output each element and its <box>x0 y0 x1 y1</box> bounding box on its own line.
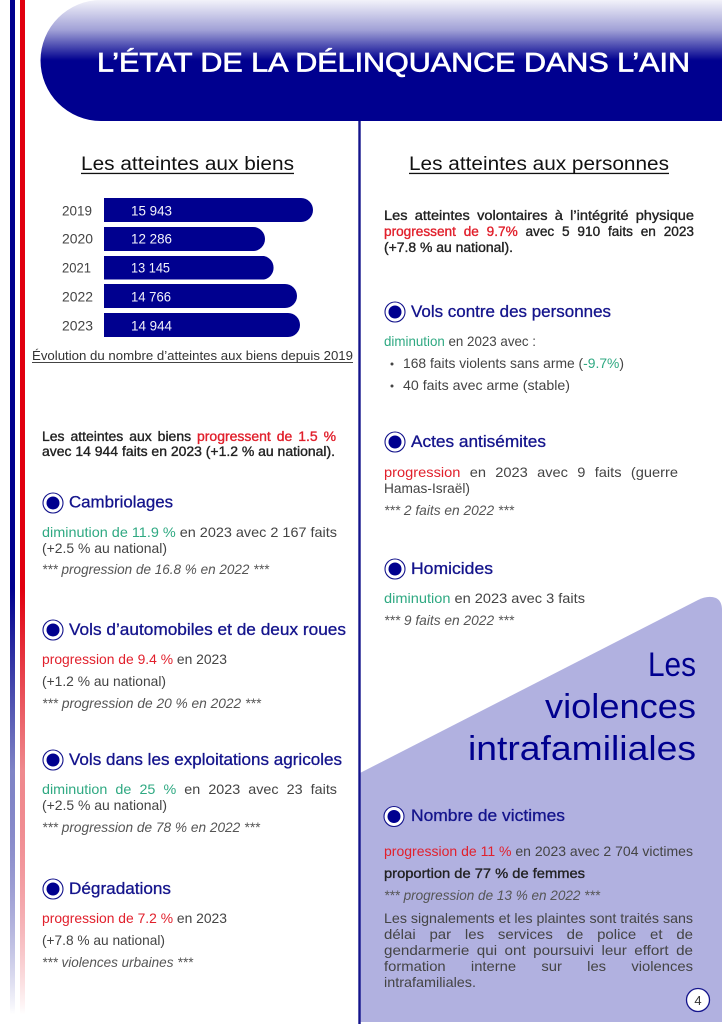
bar 2021: 13 145 <box>131 260 170 276</box>
text block: signalements: délai par les services de police et de <box>384 926 693 942</box>
bar 2020: 2020 <box>62 230 93 246</box>
section: cambriolages <box>42 493 337 577</box>
text block: signalements: Les signalements et les plaintes sont traités sans <box>384 910 693 926</box>
section: vols d'automobiles: *** progression de 20 % en 2022 *** <box>42 695 262 711</box>
text block: atteintes aux personnes summary: (+7.8 % au national). <box>384 240 513 255</box>
section: actes antisémites: Actes antisémites <box>411 433 546 451</box>
bar 2020 <box>62 227 265 251</box>
bar 2022: 2022 <box>62 288 93 304</box>
title banner: L’ÉTAT DE LA DÉLINQUANCE DANS L’AIN <box>97 48 690 78</box>
section: dégradations: (+7.8 % au national) <box>42 932 165 948</box>
bar chart: atteintes aux biens <box>62 198 313 337</box>
section: homicides: *** 9 faits en 2022 *** <box>384 612 515 628</box>
section: dégradations: progression de 7.2 % en 2023 <box>42 910 227 926</box>
icon: bullet <box>43 879 63 899</box>
heading: les violences intrafamiliales: intrafamiliales <box>468 730 696 768</box>
section: vols dans les exploitations agricoles: (+2.5 % au national) <box>42 797 167 813</box>
section: homicides <box>384 559 585 628</box>
text block: signalements <box>384 910 693 990</box>
section: cambriolages: diminution de 11.9 % en 2023 avec 2 167 faits <box>42 524 337 540</box>
section: vols d'automobiles: Vols d’automobiles et de deux roues <box>69 621 346 639</box>
section: cambriolages: Cambriolages <box>69 494 173 512</box>
section: cambriolages: *** progression de 16.8 % en 2022 *** <box>42 561 270 577</box>
section: vols d'automobiles <box>42 620 346 711</box>
page number: 4 <box>694 993 702 1008</box>
section: vols dans les exploitations agricoles: diminution de 25 % en 2023 avec 23 faits <box>42 781 337 797</box>
section: vols d'automobiles: progression de 9.4 % en 2023 <box>42 651 227 667</box>
icon: bullet <box>385 302 405 322</box>
section: vols d'automobiles: (+1.2 % au national) <box>42 673 166 689</box>
section: nombre de victimes: proportion de 77 % de femmes <box>384 865 585 881</box>
bar 2021 <box>62 256 274 280</box>
section: dégradations: *** violences urbaines *** <box>42 954 194 970</box>
heading: les atteintes aux biens: Les atteintes aux biens <box>81 154 294 175</box>
section: vols contre des personnes: diminution en 2023 avec : <box>384 333 536 349</box>
section: nombre de victimes <box>384 806 693 990</box>
heading: les violences intrafamiliales <box>468 646 696 768</box>
icon: bullet <box>385 432 405 452</box>
section: dégradations <box>42 879 227 970</box>
icon: bullet <box>385 559 405 579</box>
bar 2022: 14 766 <box>131 288 171 304</box>
heading: les violences intrafamiliales: violences <box>545 688 696 726</box>
bar 2023: 14 944 <box>131 318 172 334</box>
icon: bullet <box>43 750 63 770</box>
column divider <box>358 121 361 1024</box>
section: vols dans les exploitations agricoles: Vols dans les exploitations agricoles <box>69 751 342 769</box>
icon: bullet <box>43 493 63 513</box>
section: nombre de victimes: Nombre de victimes <box>411 807 565 825</box>
section: vols contre des personnes <box>384 302 624 393</box>
heading: les violences intrafamiliales: Les <box>648 646 696 684</box>
section: nombre de victimes: progression de 11 % en 2023 avec 2 704 victimes <box>384 843 693 859</box>
section: vols contre des personnes: 40 faits avec arme (stable) <box>403 377 570 393</box>
section: vols dans les exploitations agricoles <box>42 750 342 835</box>
section: vols contre des personnes: 168 faits violents sans arme (-9.7%) <box>403 355 624 371</box>
title banner <box>41 0 722 121</box>
tricolour stripes <box>10 0 25 1015</box>
text block: atteintes aux personnes summary: Les atteintes volontaires à l’intégrité physique <box>384 208 694 223</box>
heading: les atteintes aux personnes: Les atteintes aux personnes <box>409 154 669 175</box>
section: actes antisémites: Hamas-Israël) <box>384 480 470 496</box>
bar 2023: 2023 <box>62 318 93 334</box>
chart caption: Évolution du nombre d’atteintes aux biens depuis 2019 <box>32 348 353 363</box>
section: vols contre des personnes: Vols contre des personnes <box>411 303 611 321</box>
icon: bullet <box>43 620 63 640</box>
text block: atteintes aux biens summary: Les atteintes aux biens progressent de 1.5 % <box>42 429 336 444</box>
section: actes antisémites: progression en 2023 avec 9 faits (guerre <box>384 464 678 480</box>
text block: atteintes aux biens summary <box>42 429 336 459</box>
text block: atteintes aux biens summary: avec 14 944 faits en 2023 (+1.2 % au national). <box>42 444 335 459</box>
section: actes antisémites: *** 2 faits en 2022 *** <box>384 502 515 518</box>
section: nombre de victimes: *** progression de 13 % en 2022 *** <box>384 887 601 903</box>
section: cambriolages: (+2.5 % au national) <box>42 540 167 556</box>
text block: atteintes aux personnes summary <box>384 208 694 255</box>
bar 2019 <box>62 198 313 222</box>
text block: atteintes aux personnes summary: progressent de 9.7% avec 5 910 faits en 2023 <box>384 224 694 239</box>
bar 2022 <box>62 284 297 308</box>
panel: violences intrafamiliales background <box>360 597 722 1022</box>
section: vols dans les exploitations agricoles: *** progression de 78 % en 2022 *** <box>42 819 261 835</box>
bar 2023 <box>62 313 300 337</box>
icon: bullet <box>384 806 404 826</box>
bar 2019: 2019 <box>62 202 92 218</box>
section: dégradations: Dégradations <box>69 880 171 898</box>
text block: signalements: intrafamiliales. <box>384 974 476 990</box>
section: actes antisémites <box>384 432 678 518</box>
text block: signalements: gendarmerie qui ont poursuivi leur effort de <box>384 942 693 958</box>
bar 2021: 2021 <box>62 260 91 276</box>
bar 2020: 12 286 <box>131 230 172 246</box>
section: homicides: diminution en 2023 avec 3 faits <box>384 590 585 606</box>
bar 2019: 15 943 <box>131 202 172 218</box>
text block: signalements: formation interne sur les violences <box>384 958 693 974</box>
page number <box>686 988 710 1012</box>
section: homicides: Homicides <box>411 560 493 578</box>
